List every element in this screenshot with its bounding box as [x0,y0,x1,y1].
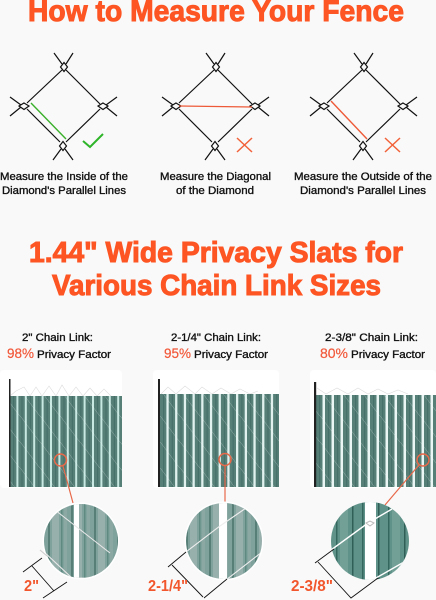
label: 2-1/4 inch: 2-1/4" [148,578,188,595]
label: 2-1/4 inch privacy factor: 2-1/4" Chain Link: [171,332,261,344]
label: 2 inch privacy factor: 2" Chain Link: [22,332,93,344]
label: 2-1/4 inch privacy factor: 95% [164,345,191,361]
dimension: 2 inch [23,558,67,598]
dimension: 2-3/8 inch [315,549,378,598]
heading: privacy slats: 1.44" Wide Privacy Slats for [29,237,403,269]
caption: inside: Measure the Inside of the [0,171,128,183]
diagram: inside measurement [10,53,117,160]
marker: zoom ring [54,454,73,503]
label: 2 inch: 2" [24,578,39,595]
caption: diagonal: of the Diamond [176,185,254,197]
marker: zoom ring [219,454,231,503]
panel: 2-1/4 inch chain link [148,332,279,598]
icon: red cross [237,138,252,152]
label: 2 inch privacy factor: Privacy Factor [37,349,111,361]
label: 2 inch privacy factor: 98% [7,345,34,361]
photo: close-up 2-3/8 inch [331,502,409,580]
caption: outside: Diamond's Parallel Lines [300,185,427,197]
label: 2-3/8 inch privacy factor: 80% [320,345,348,361]
panel: 2-3/8 inch chain link [291,332,436,598]
dimension: 2-1/4 inch [172,565,203,597]
panel: measure inside [0,53,128,197]
diagram: diagonal measurement [162,53,269,160]
photo: fence 2-1/4 inch [153,370,279,488]
panel: 2 inch chain link [0,332,122,598]
label: 2-3/8 inch privacy factor: Privacy Factor [351,349,425,361]
photo: fence 2-3/8 inch [310,370,436,488]
heading: privacy slats: Various Chain Link Sizes [52,270,381,302]
caption: outside: Measure the Outside of the [294,171,432,183]
diagram: outside measurement [310,53,417,160]
marker: zoom ring [385,454,429,505]
icon: green check [83,134,103,147]
label: 2-3/8 inch: 2-3/8" [291,578,333,595]
panel: measure outside [294,53,432,197]
photo: close-up 2-1/4 inch [168,502,264,598]
label: 2-1/4 inch privacy factor: Privacy Factor [194,349,268,361]
label: 2-3/8 inch privacy factor: 2-3/8" Chain Link: [325,332,418,344]
photo: fence 2 inch [0,370,122,488]
photo: close-up 2 inch [40,502,120,581]
caption: diagonal: Measure the Diagonal [160,171,271,183]
icon: red cross [385,138,400,152]
panel: measure diagonal [160,53,271,197]
caption: inside: Diamond's Parallel Lines [2,185,127,197]
